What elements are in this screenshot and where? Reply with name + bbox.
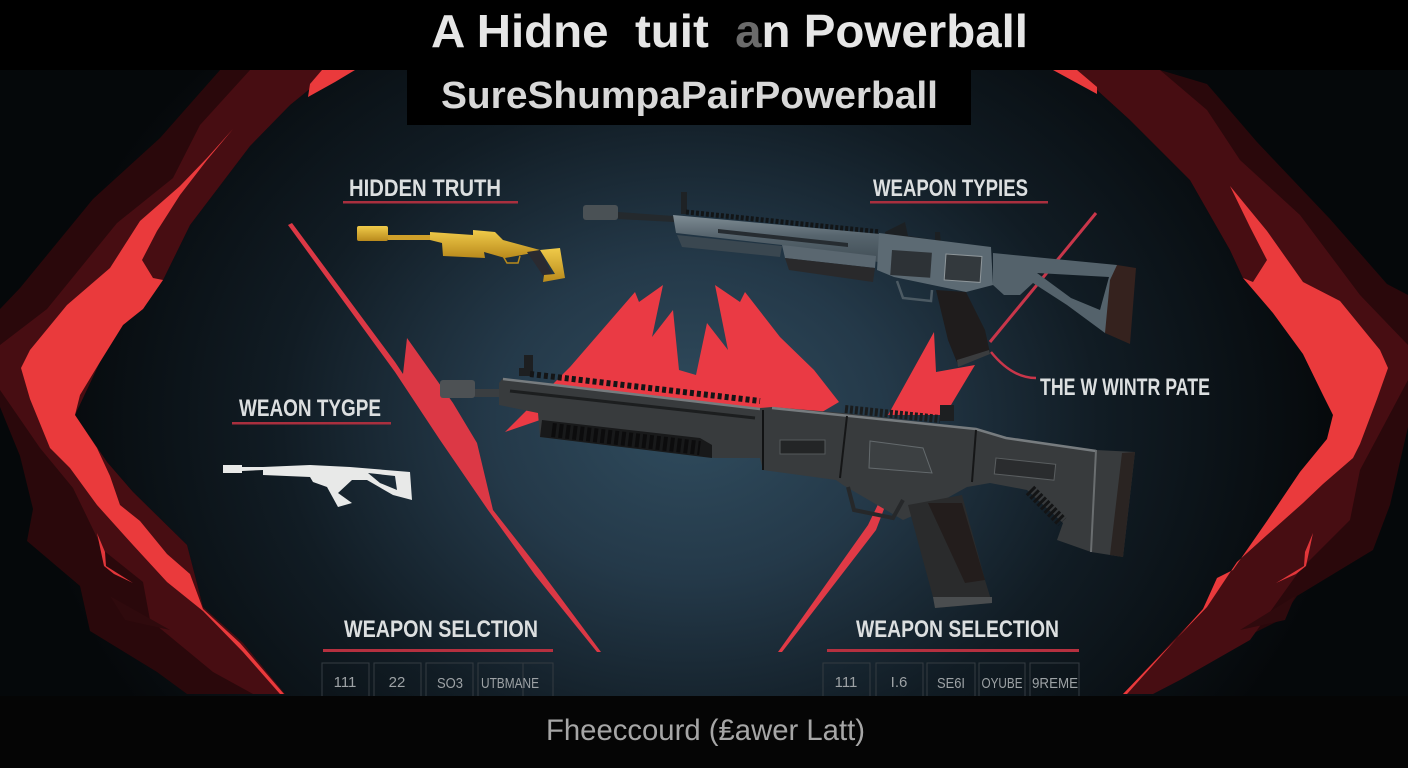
- small gold gun icon: [357, 226, 565, 282]
- grip: [936, 290, 990, 365]
- right red jagged frame: [1053, 70, 1408, 694]
- small white gun icon: [223, 465, 412, 507]
- left selection cells: UTBMANE: [481, 675, 539, 692]
- left red diagonal: [288, 223, 601, 652]
- label: winter path: THE W WINTR PATE: [1040, 374, 1210, 401]
- center red mountain shape: [505, 285, 839, 432]
- left selection cells: 22: [389, 674, 405, 691]
- body: [499, 378, 1135, 557]
- title bar: [0, 0, 1408, 70]
- right selection cells: OYUBE: [982, 675, 1022, 692]
- left selection cells: SO3: [437, 675, 463, 692]
- red connector curve: [991, 352, 1036, 378]
- lower gun image: [440, 355, 1135, 608]
- grip: [908, 495, 992, 608]
- title: A Hidne tuit an Powerball: [431, 5, 1028, 57]
- left red jagged frame: [0, 70, 355, 694]
- subtitle: SureShumpaPairPowerball: [441, 75, 938, 117]
- right selection cells: 111: [835, 674, 857, 691]
- left selection cells: 111: [334, 674, 356, 691]
- upper gun image: [583, 192, 1136, 367]
- label: weapon selection right: [827, 616, 1079, 652]
- receiver: [877, 233, 993, 292]
- right red diagonal: [778, 488, 892, 652]
- label: weapon selection left: [323, 616, 553, 652]
- footer bar: [0, 696, 1408, 768]
- center right red flare: [888, 332, 975, 415]
- label: hidden truth: HIDDEN TRUTH: [349, 175, 501, 202]
- label: weapon selection left: WEAPON SELCTION: [344, 616, 538, 643]
- right selection cells: 9REME: [1032, 675, 1078, 692]
- label: weapon selection right: WEAPON SELECTION: [856, 616, 1059, 643]
- right selection cells: [823, 663, 1079, 703]
- subtitle box: [407, 70, 971, 125]
- shroud: [673, 215, 880, 262]
- label: weapon types: WEAPON TYPIES: [873, 175, 1028, 202]
- footer text: Fheeccourd (₤awer Latt): [546, 714, 865, 747]
- stock: [993, 253, 1117, 335]
- right selection cells: SE6I: [937, 675, 965, 692]
- upper right thin red line: [990, 213, 1096, 342]
- left selection cells: [322, 663, 553, 703]
- right selection cells: I.6: [891, 674, 907, 691]
- label: weapon type left: WEAON TYGPE: [239, 395, 381, 422]
